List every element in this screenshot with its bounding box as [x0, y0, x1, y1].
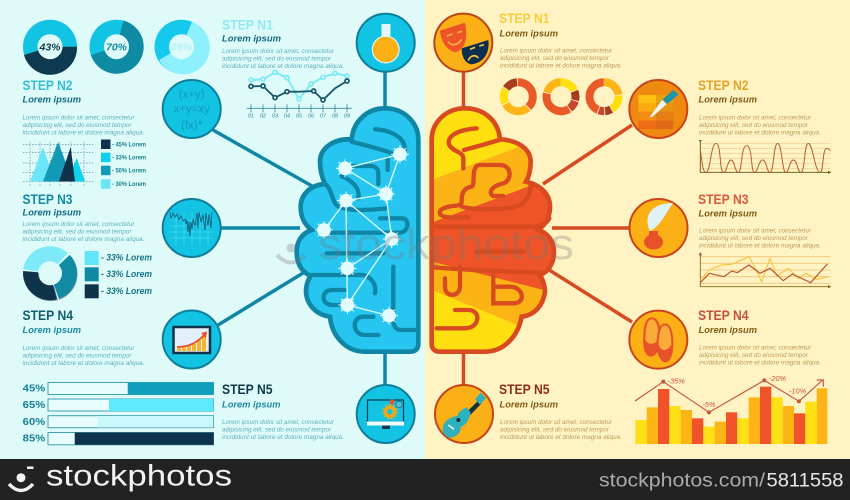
triangle chart legend: - 30% Lorem	[112, 182, 146, 188]
footer bar: stockphotos	[46, 460, 232, 492]
donut: 43%: 43%	[38, 42, 61, 54]
left step 1 line chart: 07	[320, 113, 327, 119]
right step 4 text: Lorem ipsum dolor sit amet, consectetur	[699, 344, 812, 352]
icon: feather and ink pot	[630, 199, 688, 257]
right step 3 text: STEP N3	[698, 191, 749, 207]
triangle chart legend	[101, 140, 146, 189]
icon: computer with gears	[357, 385, 415, 443]
footer bar	[0, 459, 850, 500]
segmented donuts	[504, 82, 618, 111]
left step 5 text	[222, 381, 344, 441]
right step 3 text	[698, 191, 821, 250]
left step 5 text: adipisicing elit, sed do eiusmod tempor	[222, 426, 332, 434]
left step 5 text: Lorem ipsum dolor sit amet, consectetur	[222, 419, 335, 426]
triangle chart legend: - 45% Lorem	[112, 142, 146, 148]
double line chart	[699, 252, 831, 288]
left step 3 text	[22, 191, 144, 243]
connector lines: right	[464, 70, 632, 386]
left step 1 text: incididunt ut labore et dolore magna aliqua.	[222, 63, 344, 70]
left step 2 text	[22, 77, 144, 136]
ring chart legend: - 33% Lorem	[101, 269, 152, 279]
right step 5 text	[499, 381, 622, 441]
right step 3 text: Lorem ipsum	[698, 209, 757, 220]
bar chart with trend arrow: -5%	[702, 400, 716, 409]
brain: right hemisphere	[430, 107, 557, 357]
footer bar: 5811558	[766, 470, 844, 492]
left step 1 line chart: 01	[248, 113, 254, 119]
left step 4 text: adipisicing elit, sed do eiusmod tempor	[22, 352, 132, 360]
percentage bars: 45%	[23, 384, 45, 395]
icon: flask	[357, 14, 415, 72]
right step 1 text: STEP N1	[499, 10, 550, 26]
left step 4 text: Lorem ipsum dolor sit amet, consectetur	[22, 345, 135, 352]
neural network	[315, 145, 409, 325]
percentage bars: 60%	[23, 417, 45, 428]
left step 1 text: STEP N1	[222, 16, 273, 32]
watermark: stockphotos	[318, 220, 574, 269]
left step 3 text: Lorem ipsum dolor sit amet, consectetur	[22, 221, 135, 228]
percentage bars: 85%	[23, 434, 45, 444]
icon: math formulas	[163, 80, 221, 138]
bar chart with trend arrow: -35%	[668, 376, 685, 385]
triangle chart	[23, 142, 93, 186]
right step 2 text: adipisicing elit, sed do eiusmod tempor	[699, 122, 809, 129]
left step 5 text: STEP N5	[222, 381, 273, 397]
right step 5 text: adipisicing elit, sed do eiusmod tempor	[500, 426, 610, 434]
donut: 70%	[90, 20, 144, 74]
left step 2 text: Lorem ipsum	[22, 94, 81, 106]
icon: theatre masks	[434, 14, 492, 72]
left step 1 line chart: 09	[344, 113, 350, 119]
ring chart legend	[85, 251, 152, 298]
right step 2 text	[698, 77, 821, 136]
bar chart with trend arrow: -10%	[789, 386, 807, 395]
icon: ballet shoes	[629, 311, 687, 369]
left step 1 text: adipisicing elit, sed do eiusmod tempor	[222, 56, 332, 62]
left step 1 text: Lorem ipsum	[222, 34, 281, 44]
right step 4 text: incididunt ut labore et dolore magna aliqua.	[699, 360, 821, 366]
percentage bars: 65%	[23, 400, 45, 411]
icon: growth chart on screen	[163, 310, 221, 368]
left step 4 text: Lorem ipsum	[22, 325, 81, 336]
left step 1 line chart: 08	[332, 113, 338, 119]
right step 2 text: Lorem ipsum	[698, 94, 757, 106]
left step 3 text: adipisicing elit, sed do eiusmod tempor	[22, 228, 132, 236]
right step 5 text: Lorem ipsum	[500, 400, 558, 410]
right step 4 text: STEP N4	[698, 307, 749, 323]
left step 5 text: incididunt ut labore et dolore magna aliqua.	[222, 434, 344, 441]
triangle chart legend: - 33% Lorem	[112, 156, 146, 162]
left step 1 line chart: 02	[260, 113, 266, 119]
ring chart legend: - 33% Lorem	[101, 253, 152, 263]
icon: palette and dropper	[629, 80, 687, 138]
right step 1 text: incididunt ut labore et dolore magna aliqua.	[500, 62, 622, 70]
left step 1 line chart	[247, 70, 352, 119]
left step 1 line chart: 03	[272, 113, 278, 119]
footer bar: stockphotos.com/	[599, 470, 766, 492]
segmented ring chart	[31, 254, 70, 294]
right step 1 text: adipisicing elit, sed do eiusmod tempor	[500, 55, 610, 62]
left step 3 text: incididunt ut labore et dolore magna aliqua.	[22, 236, 144, 243]
right step 2 text: STEP N2	[698, 77, 749, 93]
right background	[425, 0, 850, 459]
left step 3 text: STEP N3	[22, 191, 73, 207]
left background	[0, 0, 425, 459]
left step 3 text: Lorem ipsum	[22, 208, 81, 218]
right step 3 text: incididunt ut labore et dolore magna aliqua.	[699, 243, 821, 250]
icon: math formulas: (x+y)	[179, 89, 205, 101]
left step 5 text: Lorem ipsum	[222, 400, 281, 410]
donut: 70%: 70%	[106, 42, 128, 54]
donut: 65%	[154, 20, 210, 74]
donut: 65%: 65%	[171, 42, 193, 54]
bar chart with trend arrow	[635, 374, 827, 444]
right step 5 text: incididunt ut labore et dolore magna aliqua.	[500, 434, 622, 441]
right step 4 text: Lorem ipsum	[698, 325, 757, 336]
connector lines: left	[213, 70, 385, 386]
left step 1 line chart: 06	[308, 113, 314, 119]
triangle chart legend: - 50% Lorem	[112, 168, 146, 174]
right step 4 text	[698, 307, 821, 366]
wave chart	[699, 140, 831, 174]
right step 1 text	[499, 10, 622, 70]
right step 2 text: incididunt ut labore et dolore magna aliqua.	[699, 130, 821, 136]
left step 2 text: adipisicing elit, sed do eiusmod tempor	[22, 122, 132, 129]
right step 1 text: Lorem ipsum	[500, 29, 558, 40]
left step 2 text: incididunt ut labore et dolore magna aliqua.	[22, 130, 144, 136]
right step 5 text: STEP N5	[499, 381, 550, 397]
left step 1 line chart: 04	[284, 113, 290, 119]
left step 1 text	[222, 16, 344, 70]
right step 1 text: Lorem ipsum dolor sit amet, consectetur	[500, 48, 613, 54]
right step 2 text: Lorem ipsum dolor sit amet, consectetur	[699, 114, 812, 122]
right step 5 text: Lorem ipsum dolor sit amet, consectetur	[500, 419, 613, 426]
left step 4 text	[22, 307, 144, 367]
left step 2 text: STEP N2	[22, 77, 73, 93]
left step 2 text: Lorem ipsum dolor sit amet, consectetur	[22, 114, 135, 122]
right step 4 text: adipisicing elit, sed do eiusmod tempor	[699, 352, 809, 359]
right step 3 text: adipisicing elit, sed do eiusmod tempor	[699, 235, 809, 242]
left step 4 text: STEP N4	[22, 307, 73, 323]
icon: math formulas: x+y=xy	[173, 104, 210, 116]
donut: 43%	[23, 20, 77, 75]
icon: math formulas: (fx)*	[181, 120, 203, 132]
left step 1 text: Lorem ipsum dolor sit amet, consectetur	[222, 48, 335, 55]
icon: waveform	[163, 199, 221, 257]
ring chart legend: - 33% Lorem	[101, 286, 152, 296]
right step 3 text: Lorem ipsum dolor sit amet, consectetur	[699, 228, 812, 235]
left step 1 line chart: 05	[296, 113, 302, 119]
left step 4 text: incididunt ut labore et dolore magna aliqua.	[22, 360, 144, 367]
percentage bars	[23, 382, 214, 445]
brain: left hemisphere	[297, 108, 418, 352]
bar chart with trend arrow: -20%	[769, 374, 787, 383]
icon: guitar	[435, 385, 493, 443]
